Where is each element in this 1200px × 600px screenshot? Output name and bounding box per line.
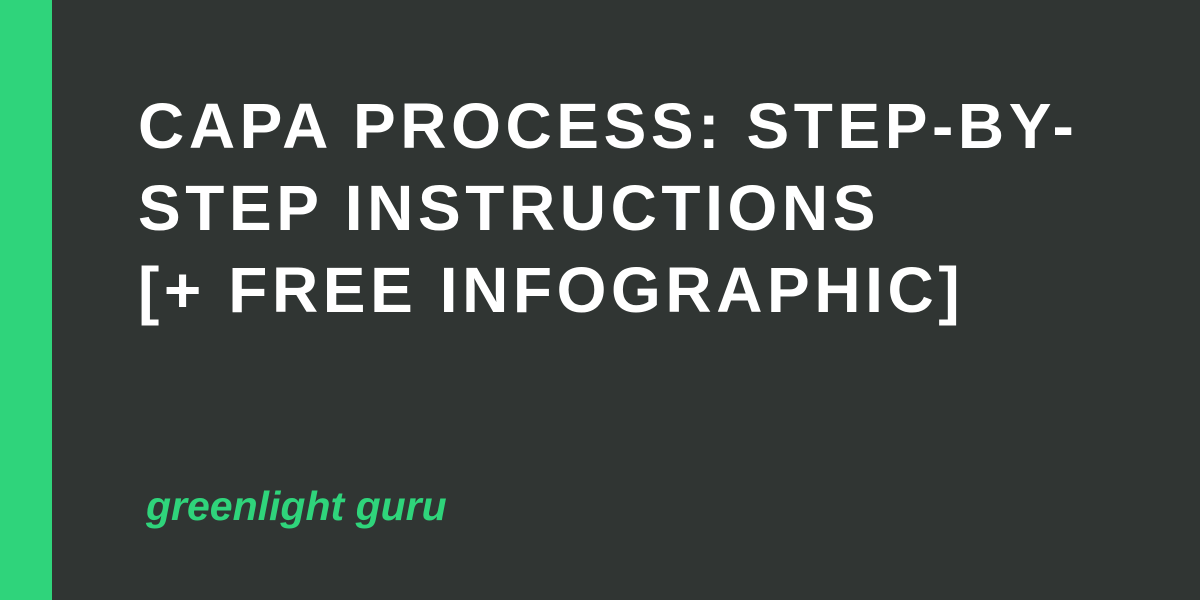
logo: greenlight guru: greenlight guru bbox=[146, 483, 447, 529]
accent bar bbox=[0, 0, 52, 600]
title: STEP INSTRUCTIONS bbox=[138, 172, 880, 244]
title bbox=[138, 90, 1078, 326]
title: [+ FREE INFOGRAPHIC] bbox=[138, 254, 964, 326]
title: CAPA PROCESS: STEP-BY- bbox=[138, 90, 1078, 162]
